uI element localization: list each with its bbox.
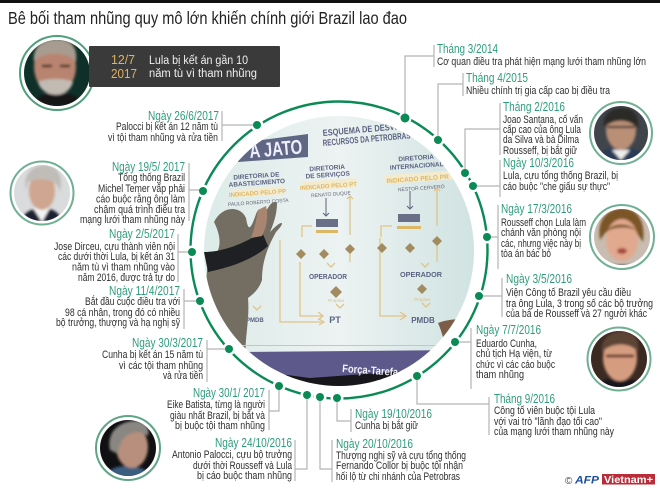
event: 20/10/2016: Thượng nghị sỹ và cựu tổng thống (336, 450, 466, 462)
callout: Lula sentence: Lula bị kết án gần 10 (149, 55, 248, 67)
event: 11/4/2017: Ngày 11/4/2017 (109, 284, 180, 298)
callout: Lula sentence: 12/7 (111, 52, 135, 67)
event: 30/1/2017: Eike Batista, từng là người (167, 399, 265, 411)
event: Tháng 2/2016: cấp cao của ông Lula (503, 124, 582, 136)
event: 30/1/2017: bị buộc tội tham nhũng (175, 420, 265, 432)
heading: scheme: RECURSOS DA PETROBRAS (322, 130, 411, 148)
column: internacional: INDICADO PELO PR (386, 174, 449, 185)
event: 10/3/2016: Lula, cựu tổng thống Brazil, bị (503, 170, 618, 182)
dot white gaps (186, 112, 494, 404)
credit: AFP Vietnam+: AFP (574, 474, 600, 486)
event: 17/3/2016: các, nhưng việc này bị (501, 238, 581, 250)
event: 2/5/2017: các dưới thời Lula, bị kết án 31 (58, 251, 175, 263)
column: servicos: DE SERVIÇOS (305, 170, 351, 181)
credit: AFP Vietnam+ (565, 474, 655, 487)
column: internacional: DIRETORIA (398, 154, 435, 163)
presenter silhouette (204, 202, 282, 360)
event: 17/3/2016: Ngày 17/3/2016 (501, 202, 572, 216)
event: 20/10/2016: Ngày 20/10/2016 (336, 437, 413, 451)
central photo: Lava Jato presentation (204, 116, 474, 386)
event: Tháng 2/2016: Joao Santana, cố vấn (503, 114, 583, 126)
column: servicos: RENATO DUQUE (311, 190, 352, 199)
flow icons (296, 214, 442, 298)
event: Tháng 2/2016: da Silva và bà Dilma (503, 134, 580, 146)
flow labels: Propina (414, 297, 430, 302)
photo: Temer (10, 162, 74, 224)
event: 2/5/2017 (54, 227, 196, 284)
event: 24/10/2016: Antonio Palocci, cựu bộ trưởng (172, 449, 292, 461)
flow labels: Propina (328, 298, 344, 303)
event: 7/7/2016: tham nhũng (476, 369, 524, 381)
photo: Cunha (588, 328, 650, 390)
event: 11/4/2017: Bắt đầu cuộc điều tra với (85, 295, 180, 308)
event: 24/10/2016: dưới thời Rousseff và Lula (193, 460, 293, 472)
caption on photo: Força-Tarefa (342, 363, 399, 379)
event: 7/7/2016 (451, 323, 555, 389)
photo: Santana (590, 102, 652, 164)
event: 26/6/2017 (108, 109, 261, 144)
event: 10/3/2016 (469, 156, 618, 197)
column: abastecimento: PAULO ROBERTO COSTA (228, 198, 289, 208)
event: 19/5/2017: Michel Temer vấp phải (98, 183, 185, 195)
event: Tháng 3/2014: Tháng 3/2014 (437, 42, 498, 56)
event: 17/3/2016: tòa án bác bỏ (501, 248, 551, 260)
flow labels: P/PMDB (240, 318, 264, 324)
event: 30/3/2017: và rửa tiền (163, 370, 203, 382)
banner: Lava Jato: A JATO (249, 136, 303, 163)
event: Tháng 4/2015 (434, 71, 611, 144)
event: 3/5/2016 (475, 272, 653, 320)
event: 17/3/2016 (483, 202, 586, 269)
event: Tháng 9/2016 (413, 372, 614, 438)
event: 2/5/2017: năm 2016, được trả tự do (78, 272, 175, 284)
event: 24/10/2016: bị cáo buộc tham nhũng (197, 470, 292, 482)
heading: scheme (322, 124, 410, 146)
dark floor (284, 372, 400, 386)
event: 30/1/2017: giàu nhất Brazil, bị bắt và (170, 409, 266, 422)
event: 19/10/2016: Ngày 19/10/2016 (355, 407, 432, 421)
event: 10/3/2016: cáo buộc "che giấu sự thực" (503, 181, 610, 193)
event: 19/5/2017 (80, 160, 207, 226)
callout: Lula sentence (89, 46, 280, 87)
top bar (0, 0, 660, 3)
event: 20/10/2016: Fernando Collor bị buộc tội nhận (336, 460, 463, 472)
event: 19/5/2017: cáo buộc rằng ông làm (96, 192, 185, 206)
event: 3/5/2016: Ngày 3/5/2016 (506, 272, 572, 286)
credit: AFP Vietnam+: © (565, 476, 573, 487)
event: 19/10/2016: Cunha bị bắt giữ (355, 419, 418, 432)
column: servicos (300, 164, 357, 198)
event: 2/5/2017: năm tù vì tham nhũng vào (72, 262, 175, 274)
flow labels (248, 272, 442, 323)
event: 19/5/2017: Ngày 19/5/ 2017 (112, 160, 185, 174)
event: 20/10/2016: hối lộ từ chi nhánh của Petrobras (336, 471, 460, 483)
event: Tháng 3/2014 (400, 42, 646, 122)
column: abastecimento (228, 172, 288, 206)
column: abastecimento: DIRETORIA DE (233, 171, 280, 182)
event: 7/7/2016: chủ tịch Hạ viện, từ (476, 348, 553, 360)
photo: Palocci (96, 416, 160, 480)
photo: Rousseff (590, 205, 654, 271)
event: 30/1/2017: Ngày 30/1/ 2017 (193, 386, 265, 400)
event: 30/3/2017: vì các tội tham nhũng (119, 360, 203, 372)
event: 30/3/2017 (102, 336, 233, 382)
flow labels: PT (329, 315, 341, 325)
event: 24/10/2016: Ngày 24/10/2016 (215, 436, 292, 450)
event: Tháng 9/2016: của mạng lưới tham nhũng này (494, 426, 614, 438)
title: Bê bối tham nhũng quy mô lớn khiến chính giới Brazil lao đao (8, 8, 407, 28)
event: 26/6/2017: vì tội tham nhũng và rửa tiền (108, 132, 218, 144)
event: Tháng 2/2016 (461, 100, 583, 177)
presenter head on right edge (438, 319, 456, 337)
flow labels: OPERADOR (309, 272, 348, 281)
event: 19/5/2017: chậm quá trình điều tra (94, 204, 186, 216)
callout: Lula sentence: năm tù vì tham nhũng (149, 68, 257, 80)
heading: scheme: ESQUEMA DE DESVIO (322, 121, 403, 138)
event: Tháng 4/2015: Nhiều chính trị gia cấp cao bị điều tra (466, 85, 611, 97)
event: 26/6/2017: Ngày 26/6/2017 (148, 109, 219, 123)
event: 2/5/2017: Ngày 2/5/2017 (109, 227, 175, 241)
event: Tháng 9/2016: Tháng 9/2016 (494, 392, 555, 406)
column: abastecimento: ABASTECIMENTO (228, 178, 285, 189)
event: 7/7/2016: Eduardo Cunha, (476, 338, 537, 350)
credit: AFP Vietnam+: Vietnam+ (604, 475, 653, 486)
banner: Lava Jato (238, 134, 308, 163)
photo: Lula (20, 36, 94, 110)
event: 7/7/2016: chức vì các cáo buộc (476, 359, 555, 371)
event: 11/4/2017 (56, 284, 204, 329)
column: abastecimento: INDICADO PELO PP (229, 189, 286, 199)
callout: Lula sentence: 2017 (111, 66, 137, 81)
event: 19/5/2017: mạng lưới tham nhũng này (80, 214, 185, 226)
event: 2/5/2017: Jose Dirceu, cựu thành viên nội (54, 241, 175, 253)
event: 30/3/2017: Cunha bị kết án 15 năm tù (102, 349, 203, 361)
event: Tháng 2/2016: Tháng 2/2016 (503, 100, 565, 114)
event: 7/7/2016: Ngày 7/7/2016 (476, 323, 541, 337)
column: internacional: INTERNACIONAL (390, 161, 444, 172)
event: 11/4/2017: 98 cá nhân, trong đó có nhiều (65, 307, 180, 319)
event: Tháng 4/2015: Tháng 4/2015 (466, 71, 528, 85)
event: 11/4/2017: bộ trưởng, thượng và hạ nghị sỹ (56, 317, 180, 329)
event: 19/5/2017: Tổng thống Brazil (118, 172, 185, 184)
event: 26/6/2017: Palocci bị kết án 12 năm tù (116, 121, 218, 133)
flow arrows (253, 188, 440, 325)
event: Tháng 9/2016: Công tố viên buộc tội Lula (494, 405, 596, 417)
event: 10/3/2016: Ngày 10/3/2016 (503, 156, 574, 170)
column: internacional: NESTOR CERVERÓ (398, 183, 445, 193)
event: 17/3/2016: chánh văn phòng nội (501, 227, 581, 239)
column: servicos: INDICADO PELO PT (300, 182, 357, 192)
event: 19/10/2016 (333, 394, 432, 432)
timeline ring (190, 102, 488, 398)
event: 20/10/2016 (316, 393, 466, 483)
column: servicos: DIRETORIA (309, 164, 346, 173)
event: 30/1/2017 (167, 382, 283, 432)
event: Tháng 9/2016: với vai trò "lãnh đạo tối cao" (494, 416, 602, 428)
event: 24/10/2016 (172, 391, 311, 482)
event: 30/3/2017: Ngày 30/3/2017 (132, 336, 203, 350)
flow labels: PMDB (411, 316, 435, 325)
purple band (249, 350, 431, 380)
column: internacional (384, 154, 454, 192)
screen lower edge (242, 345, 436, 346)
event: 17/3/2016: Rousseff chọn Lula làm (501, 217, 586, 229)
flow labels: OPERADOR (400, 270, 443, 279)
event: Tháng 2/2016: Rousseff, bị bắt giữ (503, 144, 577, 157)
